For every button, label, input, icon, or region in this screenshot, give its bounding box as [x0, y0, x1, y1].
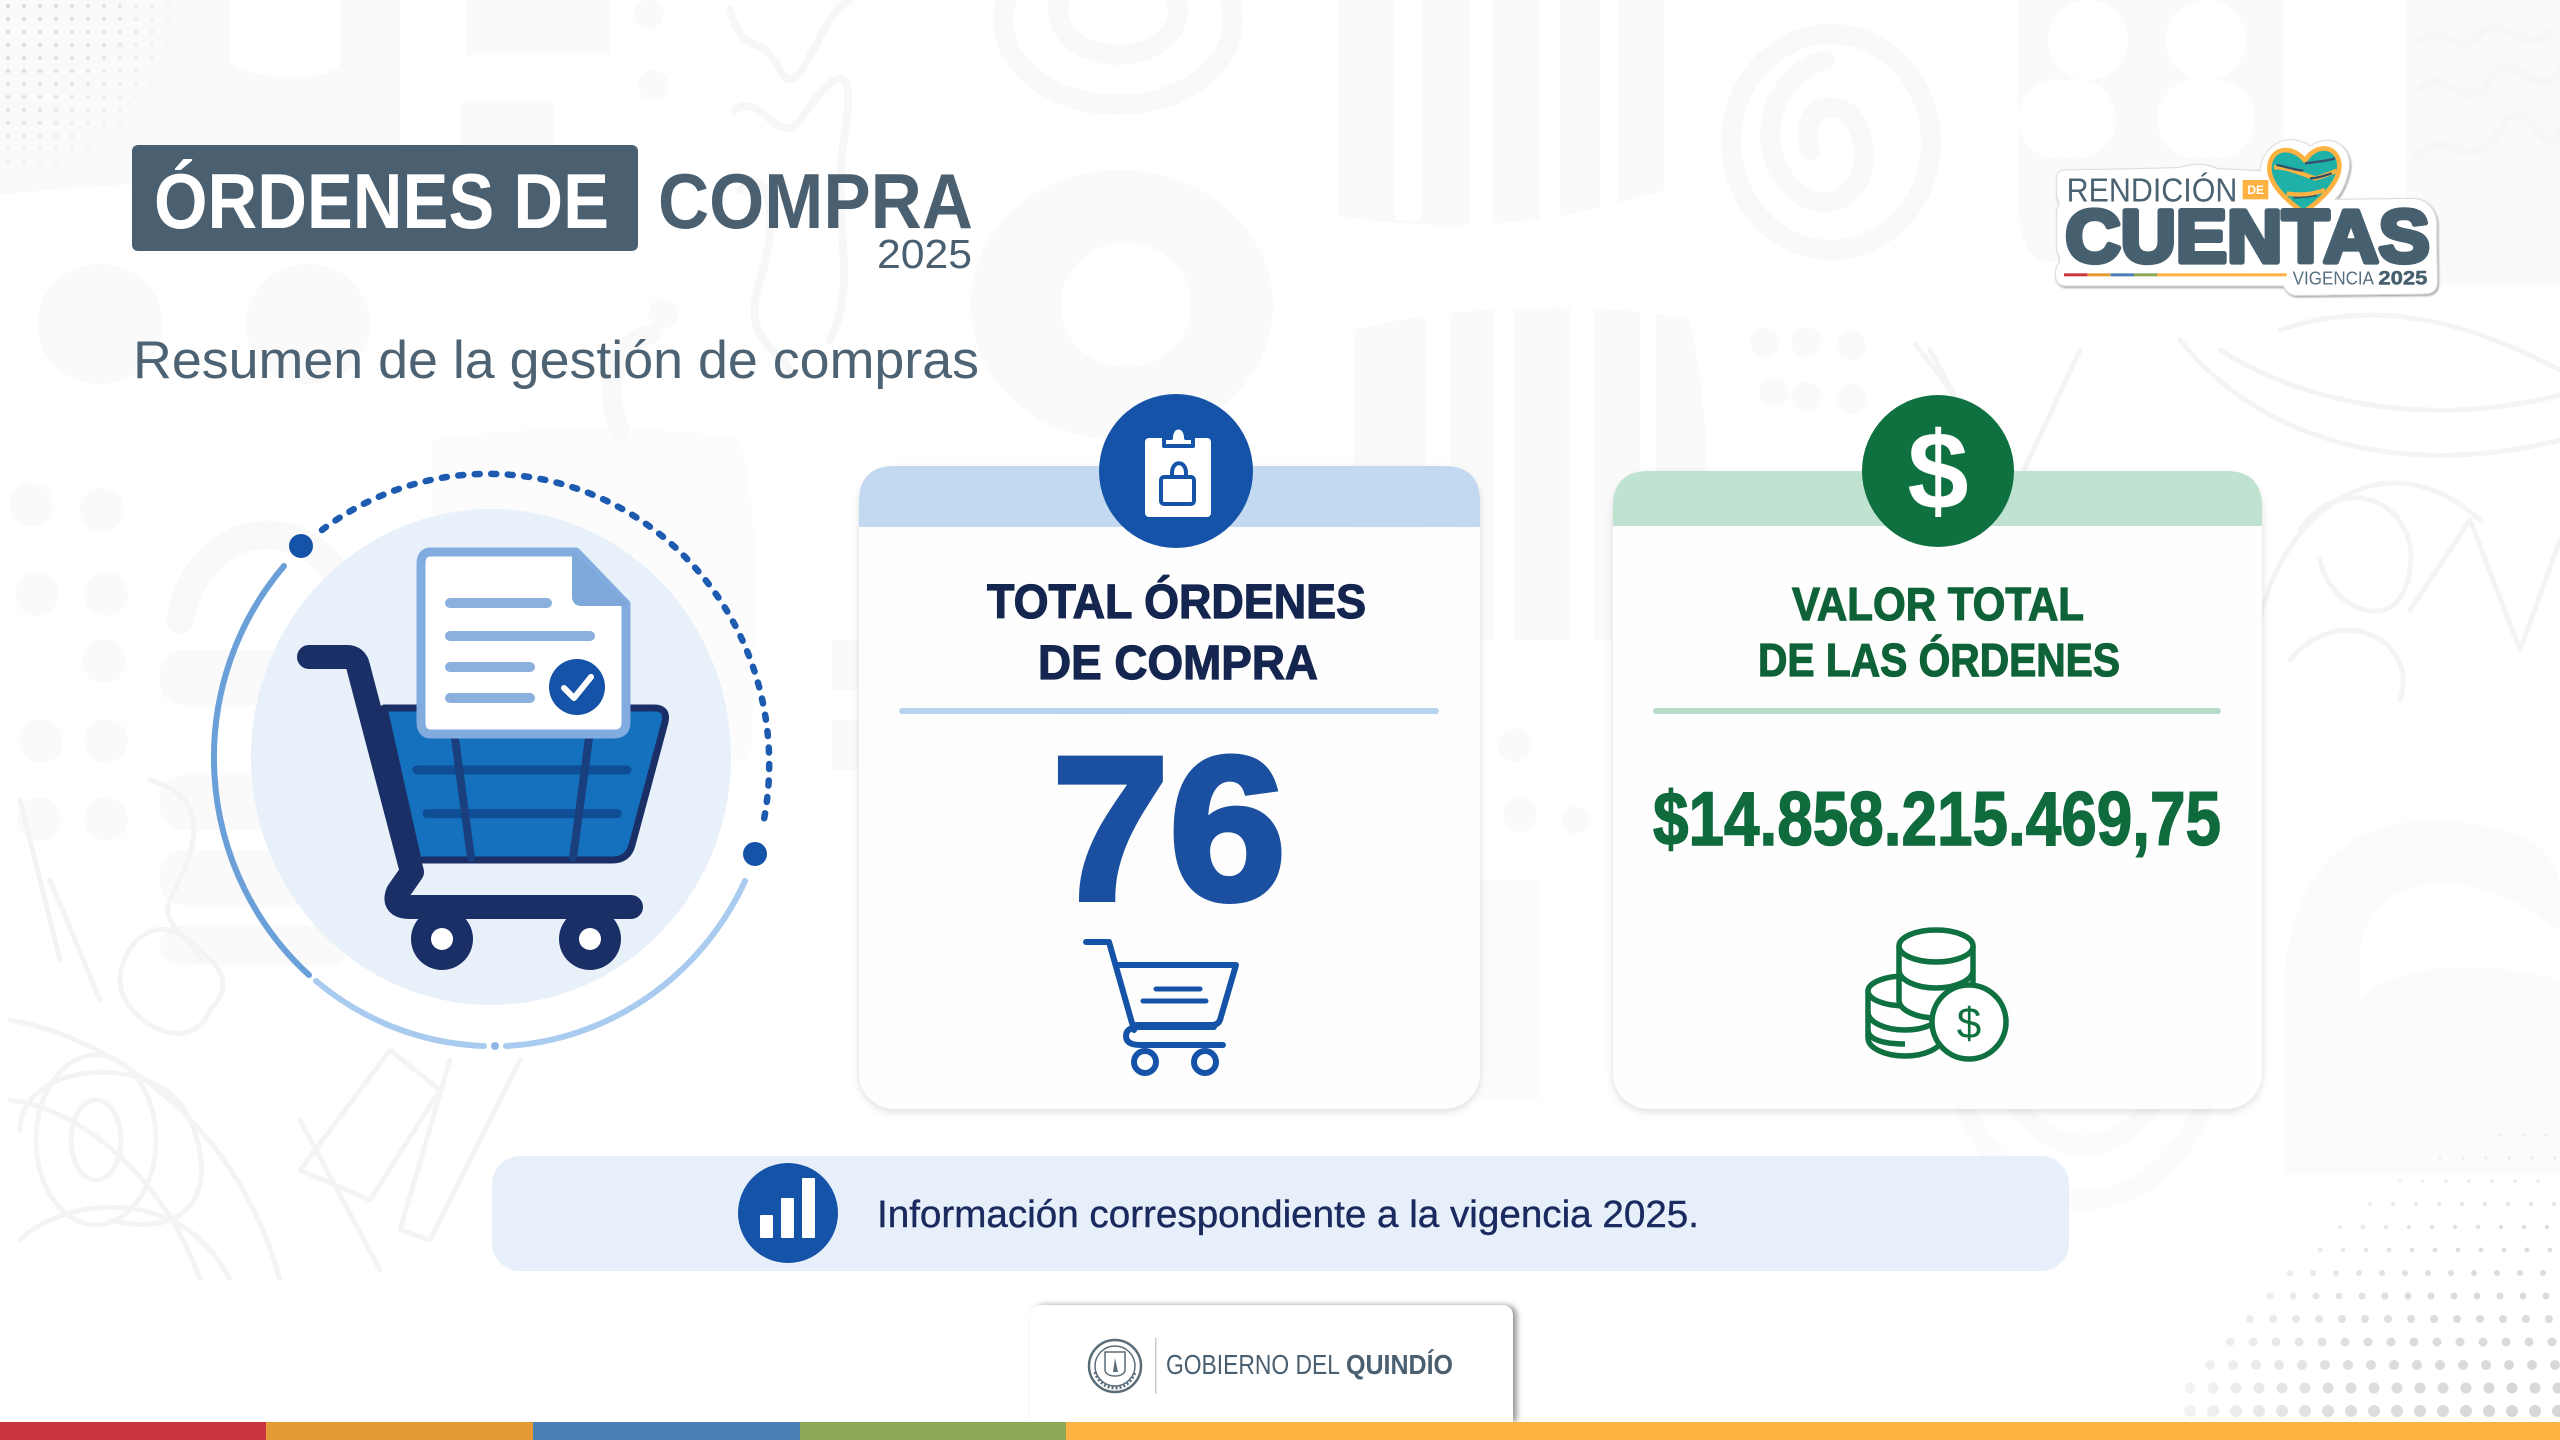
- bottom color bar: [0, 1422, 2560, 1440]
- title: Órdenes de compra: ÓRDENES DE: [154, 157, 609, 245]
- cart basket: [384, 708, 666, 860]
- card divider: [1653, 708, 2221, 714]
- title: Órdenes de compra: [132, 145, 973, 277]
- basket grid lines: [417, 738, 627, 858]
- card heading: TOTAL ÓRDENES: [987, 574, 1366, 629]
- logo tag: de: DE: [2247, 183, 2264, 197]
- logo: Rendición de Cuentas: [2055, 140, 2437, 295]
- logo icon: heart: [2269, 148, 2339, 212]
- card heading: [1758, 578, 2120, 686]
- card body: [1613, 471, 2262, 1109]
- title: Órdenes de compra: COMPRA: [658, 157, 973, 245]
- panel: valor total de las órdenes: [1613, 395, 2262, 1109]
- card value: $14.858.215.469,75: [1653, 777, 2221, 862]
- icon: cart outline: [1086, 942, 1236, 1073]
- card heading: DE LAS ÓRDENES: [1758, 634, 2120, 686]
- card band: [1613, 471, 2262, 526]
- dot pattern: bottom right: [2190, 1135, 2560, 1411]
- card body: [859, 466, 1480, 1109]
- logo text: Cuentas: CUENTAS: [2065, 194, 2430, 278]
- outer ring arcs: [214, 474, 769, 1050]
- divider: [1155, 1338, 1156, 1394]
- logo color bar: [2064, 273, 2287, 276]
- card heading: DE COMPRA: [1038, 637, 1318, 690]
- card number: 76: [1052, 715, 1286, 943]
- panel: total órdenes de compra: [859, 394, 1480, 1109]
- icon: dollar: [1862, 395, 2014, 547]
- logo text: Rendición: RENDICIÓN: [2067, 172, 2237, 210]
- card heading: VALOR TOTAL: [1792, 578, 2084, 630]
- logo text: vigencia 2025: [2293, 267, 2428, 289]
- logo text: GOBIERNO DEL: [1166, 1349, 1340, 1380]
- ring dots: [289, 534, 767, 866]
- card band: [859, 466, 1480, 527]
- icon: dollar: $: [1907, 410, 1969, 533]
- logo text: QUINDÍO: [1346, 1349, 1453, 1380]
- inner disc: [251, 509, 731, 1005]
- icon: coins: [1868, 930, 2006, 1059]
- subtitle: Resumen de la gestión de compras: [133, 331, 979, 390]
- logo text: vigencia 2025: VIGENCIA: [2293, 267, 2375, 288]
- check badge: [549, 659, 605, 715]
- document: [421, 552, 630, 734]
- icon: clipboard with padlock: [1099, 394, 1253, 548]
- info bar: [492, 1156, 2069, 1271]
- card divider: [899, 708, 1439, 714]
- illustration: shopping cart with document: [214, 474, 769, 1050]
- logo tag: de: [2243, 180, 2268, 199]
- icon: bar chart: [738, 1163, 838, 1263]
- logo text: vigencia 2025: 2025: [2378, 268, 2428, 289]
- card heading: [987, 574, 1366, 690]
- title: Órdenes de compra: 2025: [877, 231, 972, 277]
- coin dollar sign: $: [1957, 999, 1981, 1048]
- cart wheels: [411, 908, 621, 970]
- icon: seal: [1089, 1340, 1141, 1392]
- cart frame: [309, 657, 631, 907]
- info text: Información correspondiente a la vigencia 2025.: [877, 1194, 1699, 1236]
- government logo tab: [1030, 1305, 1513, 1422]
